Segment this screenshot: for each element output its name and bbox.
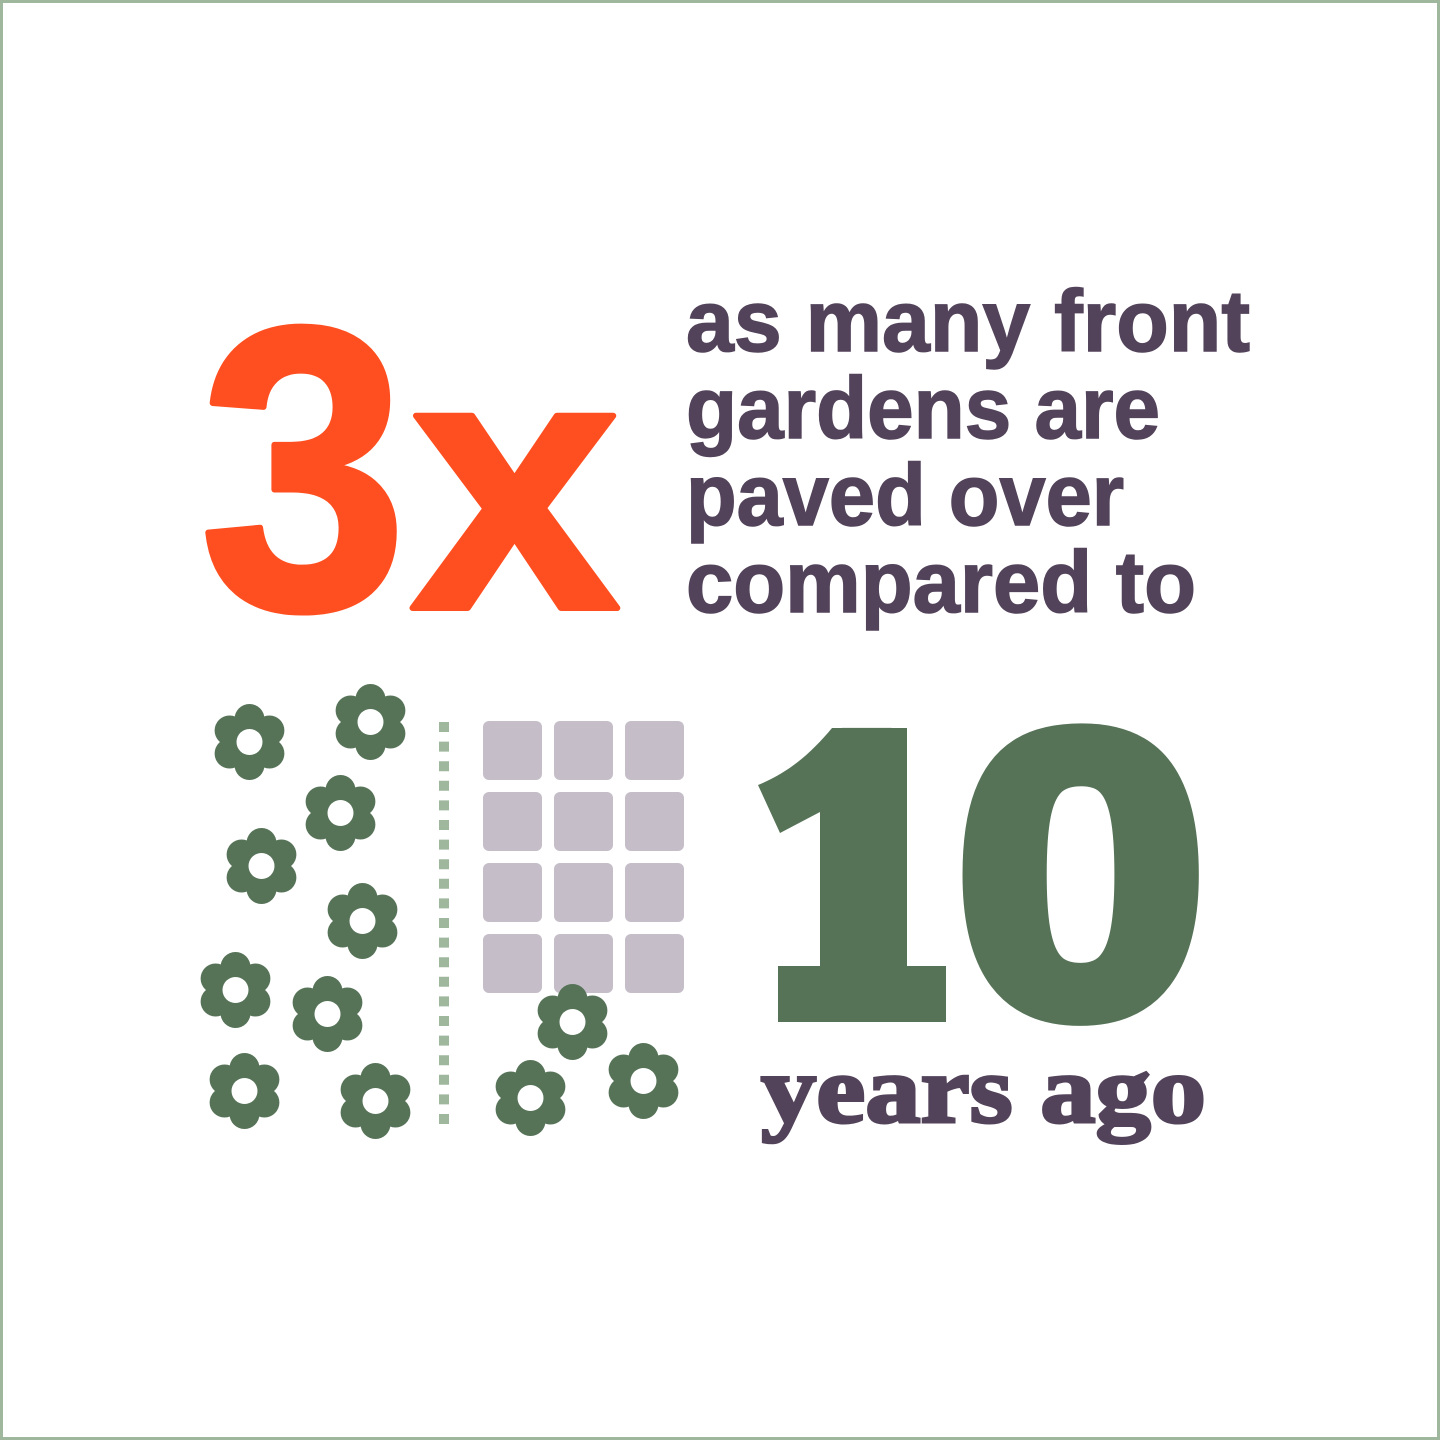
years ago: years ago: [761, 1036, 1206, 1143]
big number: 3x: 3: [200, 244, 408, 694]
flowers: front gardens now: [496, 984, 678, 1136]
statement text: paved over: [686, 447, 1124, 544]
big number: 3x: x: [410, 279, 622, 686]
statement text: gardens are: [686, 360, 1160, 457]
statement text: [686, 273, 1250, 631]
big number: 10: [758, 643, 1206, 1105]
paving tiles: [483, 721, 684, 993]
big number: 10: 0: [956, 651, 1206, 1097]
statement text: compared to: [686, 534, 1196, 631]
flowers: front gardens then: [201, 684, 410, 1139]
statement text: as many front: [686, 273, 1250, 370]
big number: 3x: [200, 244, 622, 694]
big number: 10: 1: [762, 643, 950, 1105]
